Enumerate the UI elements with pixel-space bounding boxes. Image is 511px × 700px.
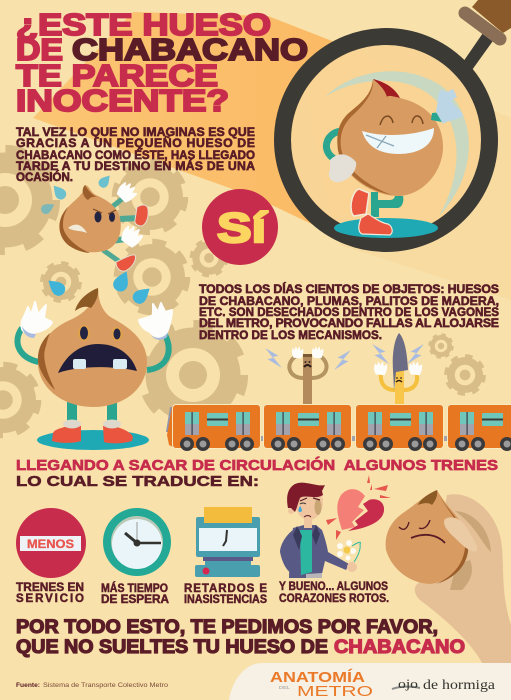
section heading — [16, 456, 498, 490]
intro text — [16, 125, 255, 184]
heartbroken man — [280, 475, 391, 578]
happy apricot pit character — [325, 71, 469, 238]
Si circle: Sí — [217, 204, 268, 251]
footer panel — [229, 663, 511, 700]
logo: Anatomia del Metro: METRO — [297, 683, 373, 700]
body text: DENTRO DE LOS MECANISMOS. — [199, 328, 382, 342]
section heading: LO CUAL SE TRADUCE EN: — [16, 473, 259, 490]
Si circle — [202, 189, 278, 265]
magnifying glass — [282, 0, 511, 244]
body text: DEL METRO, PROVOCANDO FALLAS AL ALOJARSE — [199, 316, 499, 330]
title: CHABACANO — [72, 32, 308, 67]
sweat drops — [39, 172, 154, 306]
broken heart — [326, 475, 391, 540]
angry apricot pit character — [17, 288, 172, 450]
logo: Anatomia del Metro — [270, 669, 373, 700]
title — [16, 7, 308, 118]
body text: DE CHABACANO, PLUMAS, PALITOS DE MADERA, — [199, 294, 499, 308]
body text: TODOS LOS DÍAS CIENTOS DE OBJETOS: HUESOS — [199, 281, 499, 296]
icon labels: INASISTENCIAS — [184, 594, 267, 606]
logo: Anatomia del Metro: DEL — [279, 685, 291, 690]
intro text: TAL VEZ LO QUE NO IMAGINAS ES QUE — [16, 125, 255, 139]
source note: Sistema de Transporte Colectivo Metro — [43, 683, 169, 689]
body text: ETC. SON DESECHADOS DENTRO DE LOS VAGONES — [199, 305, 499, 319]
title: DE — [16, 32, 63, 67]
icon labels: SERVICIO — [16, 593, 84, 605]
title: ¿ESTE HUESO — [16, 7, 271, 42]
icon: clock — [103, 508, 171, 576]
light beam — [33, 12, 345, 240]
closing message: POR TODO ESTO, TE PEDIMOS POR FAVOR, — [16, 617, 438, 638]
icon labels: TRENES EN — [16, 582, 84, 594]
wooden stick character — [265, 347, 351, 405]
icon labels — [16, 581, 389, 606]
section heading: LLEGANDO A SACAR DE CIRCULACIÓN ALGUNOS TRENES — [16, 456, 498, 474]
icon labels: CORAZONES ROTOS. — [279, 593, 389, 605]
icon labels: DE ESPERA — [101, 594, 169, 606]
intro text: GRACIAS A UN PEQUEÑO HUESO DE — [16, 135, 255, 150]
source note: Fuente: — [16, 683, 40, 689]
icon: time clock — [195, 507, 260, 577]
intro text: TARDE A TU DESTINO EN MÁS DE UNA — [16, 158, 255, 173]
logo: ojo de hormiga: ojo — [398, 676, 418, 691]
icon labels: MÁS TIEMPO — [101, 582, 168, 595]
logo: Anatomia del Metro: ANATOMÍA — [270, 669, 365, 686]
feather character — [372, 333, 424, 405]
intro text: CHABACANO COMO ÉSTE, HAS LLEGADO — [16, 147, 255, 162]
icon: menos sign — [16, 508, 86, 578]
body text — [199, 281, 499, 342]
metro train — [166, 404, 511, 451]
closing message — [16, 617, 465, 658]
hand holding sad apricot pit — [386, 490, 511, 663]
title: TE PARECE — [16, 58, 218, 93]
gears background — [0, 152, 483, 433]
logo: ojo de hormiga: de hormiga — [423, 678, 496, 693]
title: INOCENTE? — [16, 83, 229, 118]
intro text: OCASIÓN. — [16, 169, 73, 184]
closing message: QUE NO SUELTES TU HUESO DE — [16, 637, 328, 658]
icon labels: Y BUENO... ALGUNOS — [279, 581, 388, 593]
source note — [16, 683, 169, 689]
flower — [337, 540, 361, 562]
falling angry apricot pit character — [59, 181, 148, 271]
logo: ojo de hormiga — [392, 676, 496, 693]
icon: menos sign: MENOS — [27, 539, 74, 551]
icon labels: RETARDOS E — [184, 583, 267, 595]
closing message: CHABACANO — [334, 637, 465, 658]
